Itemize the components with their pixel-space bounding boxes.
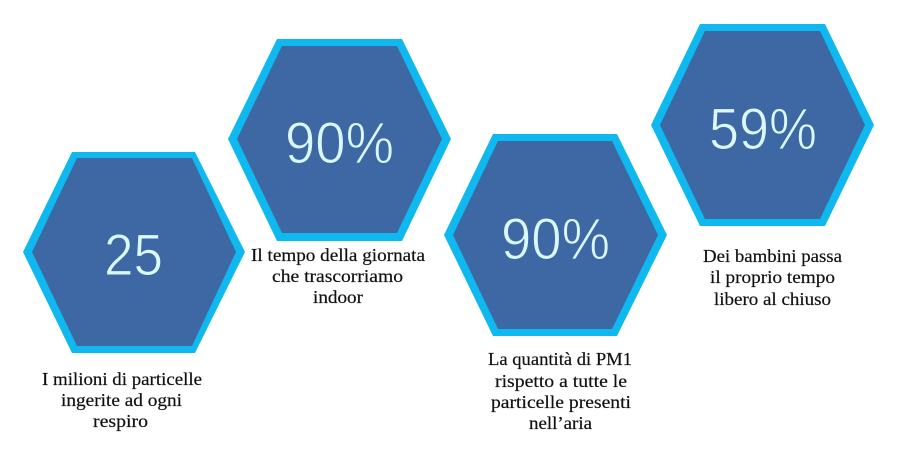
caption: Il tempo della giornata	[251, 245, 425, 265]
caption: ingerite ad ogni	[61, 390, 182, 410]
caption: rispetto a tutte le	[495, 371, 627, 391]
panel: 25 million particles	[23, 152, 245, 431]
caption: nell’aria	[529, 413, 592, 433]
caption: particelle presenti	[491, 392, 631, 412]
panel: 90% time indoors	[228, 39, 451, 307]
panel: 90% PM1	[444, 134, 667, 433]
caption	[488, 349, 632, 433]
caption	[42, 369, 202, 431]
caption	[251, 245, 425, 307]
hexagon border	[23, 152, 245, 353]
caption: libero al chiuso	[714, 289, 831, 309]
hexagon border	[651, 24, 874, 226]
hexagon fill	[453, 141, 658, 329]
caption: La quantità di PM1	[488, 349, 632, 369]
number: 90%	[501, 207, 610, 272]
number: 59%	[709, 97, 817, 162]
caption: respiro	[93, 411, 148, 431]
caption: il proprio tempo	[710, 267, 835, 287]
hexagon fill	[237, 46, 442, 233]
hexagon border	[444, 134, 667, 336]
caption: Dei bambini passa	[703, 246, 842, 266]
caption	[703, 246, 842, 309]
hexagon fill	[660, 31, 865, 219]
caption: I milioni di particelle	[42, 369, 202, 389]
panel: 59% children	[651, 24, 874, 309]
caption: indoor	[313, 287, 363, 307]
caption: che trascorriamo	[272, 266, 403, 286]
hexagon border	[228, 39, 451, 241]
number: 25	[104, 223, 163, 288]
number: 90%	[285, 111, 394, 176]
hexagon fill	[32, 158, 236, 346]
